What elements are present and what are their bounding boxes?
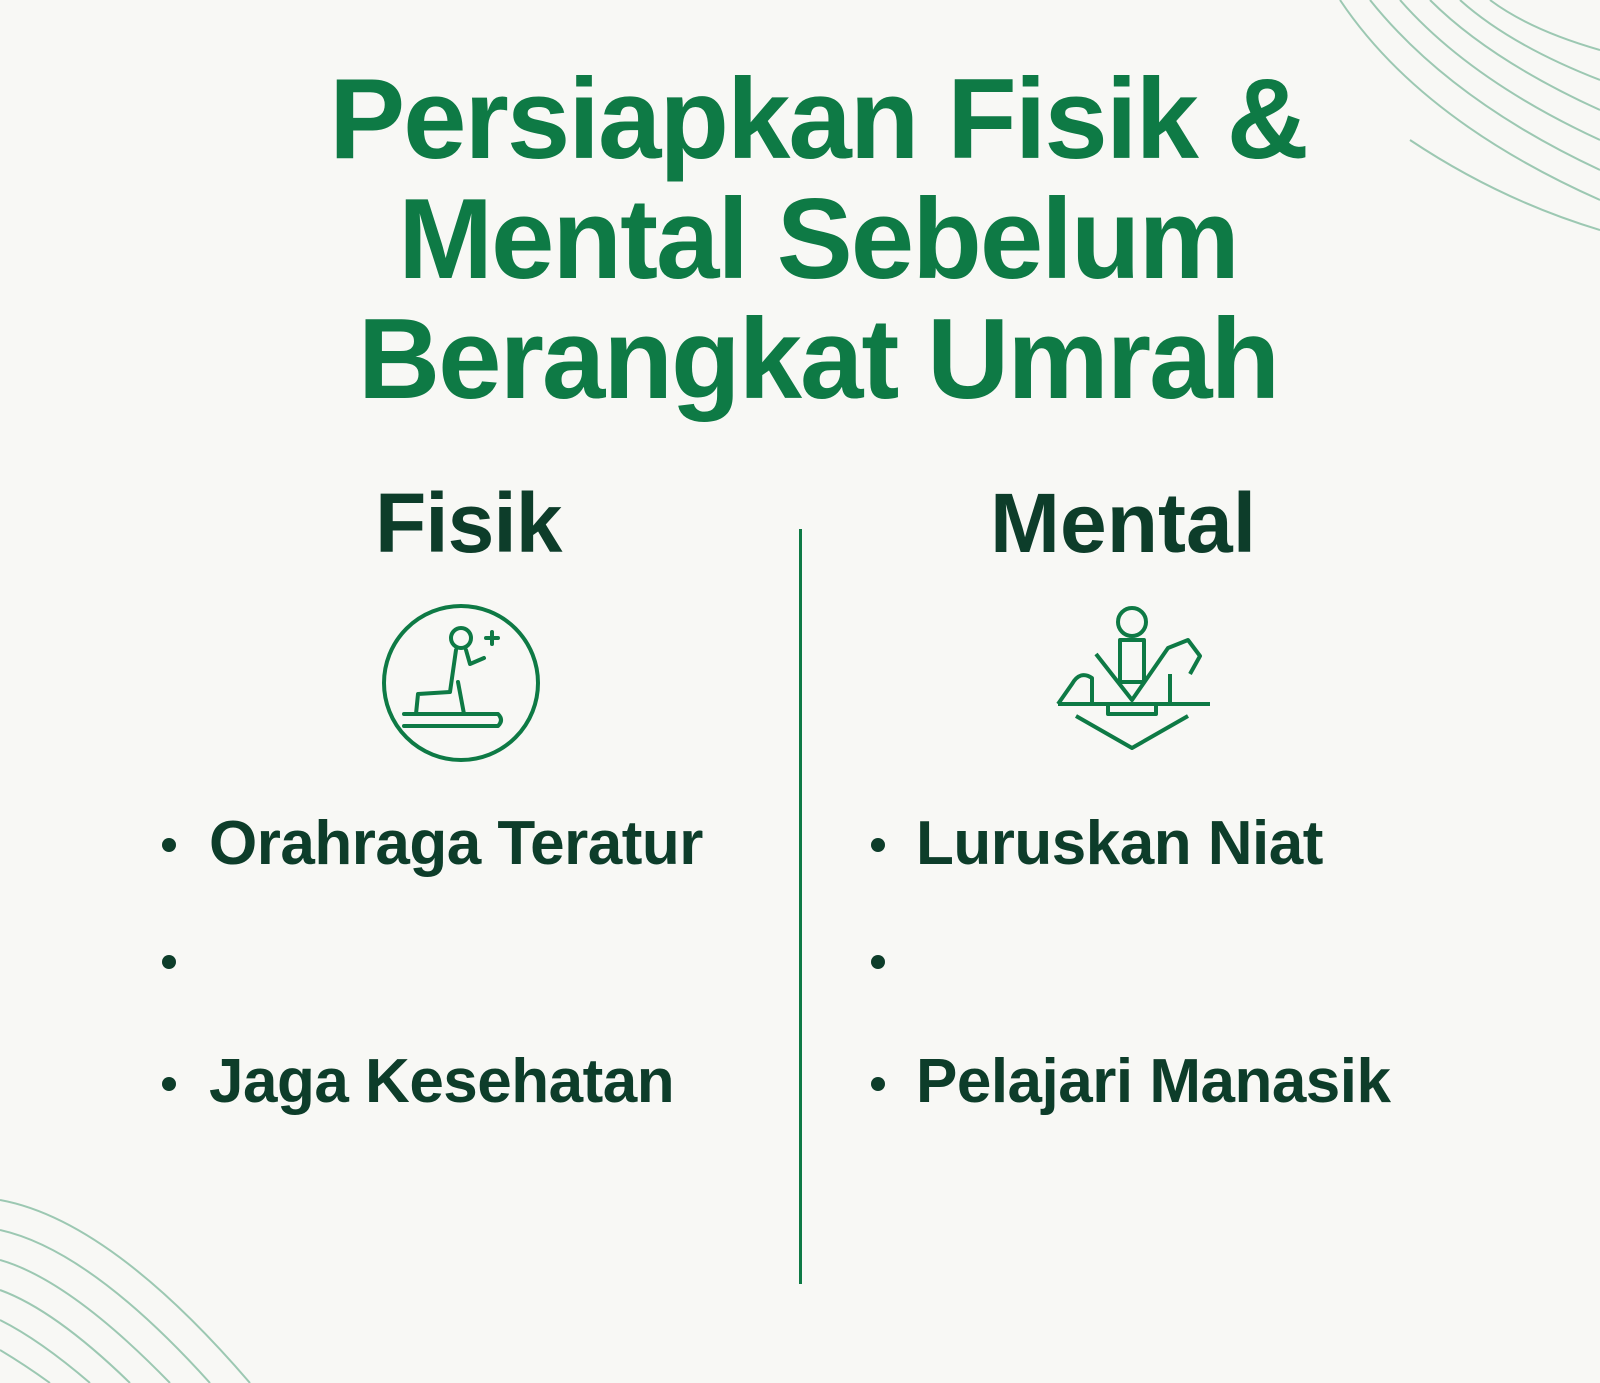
- heading: Fisik: Fisik: [375, 476, 561, 570]
- title: [329, 56, 1307, 423]
- divider: [799, 529, 802, 1284]
- list: Fisik: [162, 809, 703, 1116]
- bullet 1: [162, 838, 176, 852]
- heading: Mental: Mental: [990, 476, 1256, 570]
- title: Berangkat Umrah: [358, 296, 1278, 423]
- icon: mental: [1056, 606, 1210, 750]
- title: Mental Sebelum: [398, 176, 1238, 303]
- list: Mental: [871, 809, 1391, 1116]
- bullet 2: [162, 955, 176, 969]
- item: Jaga Kesehatan: Jaga Kesehatan: [209, 1047, 674, 1116]
- decoration: waves bottom left: [0, 1199, 251, 1383]
- decoration: waves top right: [1339, 0, 1600, 231]
- item: Luruskan Niat: Luruskan Niat: [916, 809, 1323, 878]
- bullet 3: [871, 1077, 885, 1091]
- bullet 2: [871, 955, 885, 969]
- icon: exercise: [382, 604, 540, 762]
- bullet 1: [871, 838, 885, 852]
- item: Pelajari Manasik: Pelajari Manasik: [916, 1047, 1390, 1116]
- bullet 3: [162, 1077, 176, 1091]
- title: Persiapkan Fisik &: [329, 56, 1307, 183]
- item: Orahraga Teratur: Orahraga Teratur: [209, 809, 703, 878]
